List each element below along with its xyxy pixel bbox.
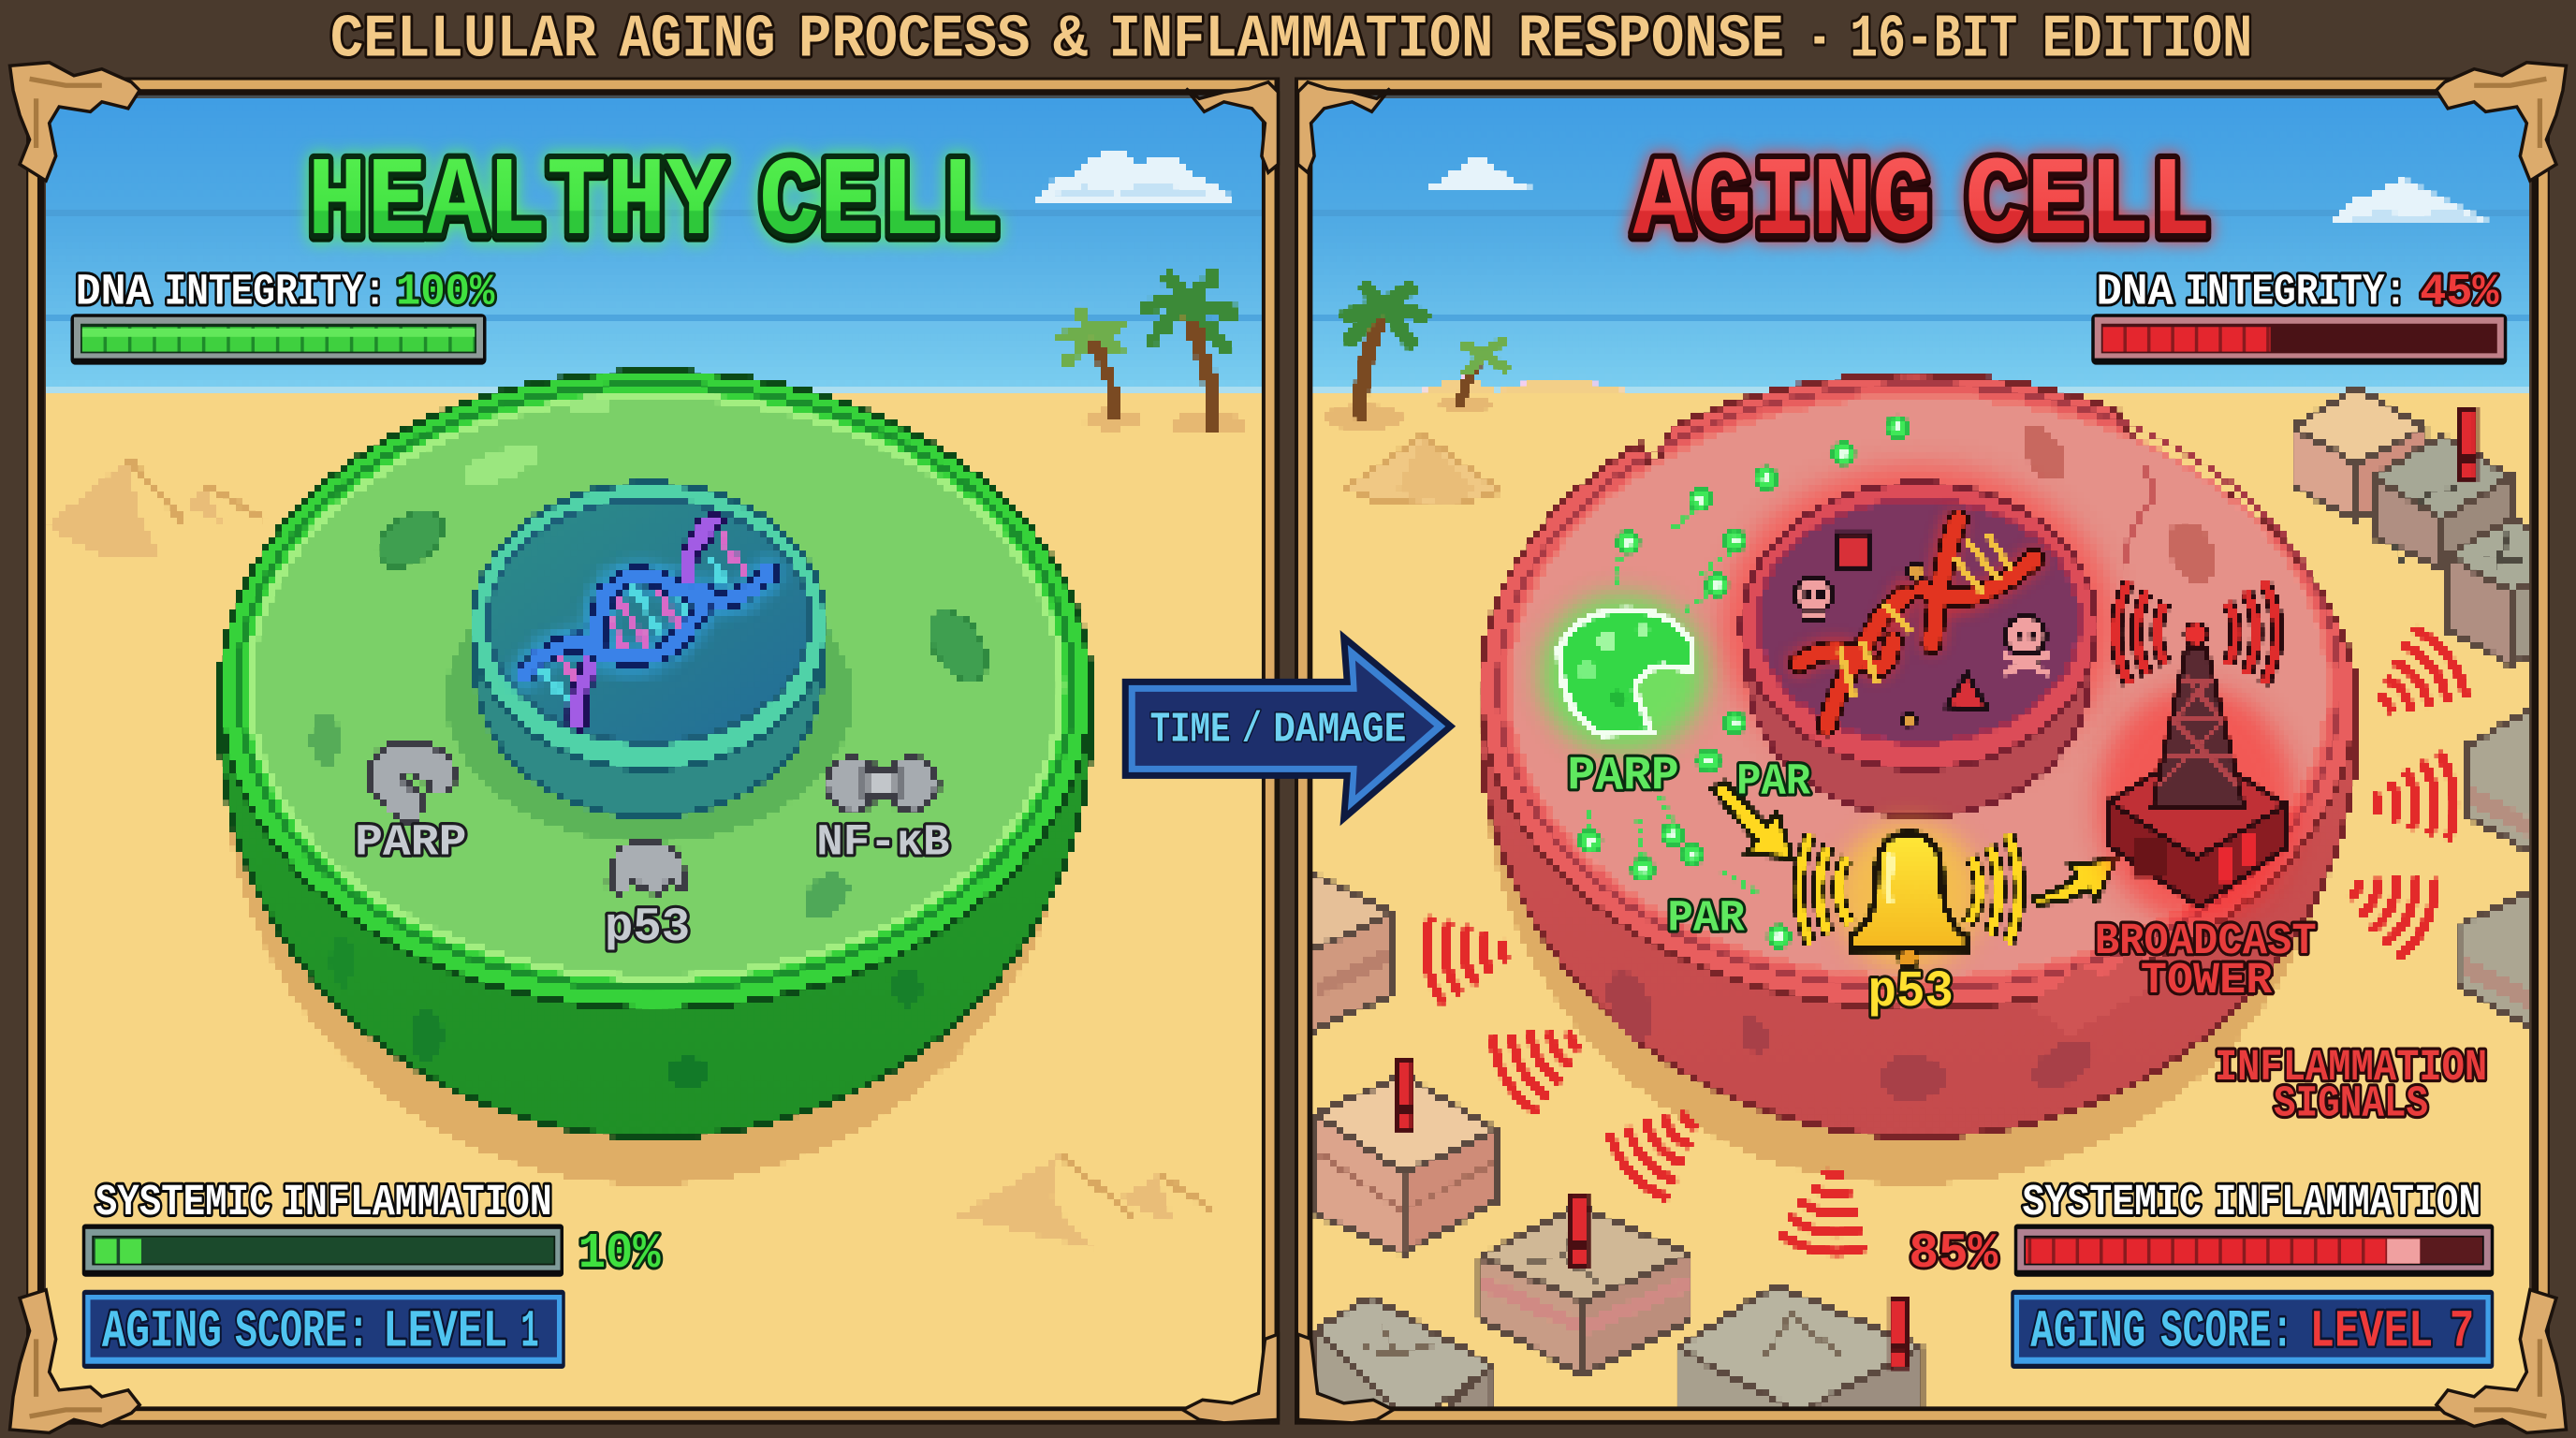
frame: healthy panel [33,84,1271,1416]
tissue block: right edge lower [2458,892,2563,1051]
title: INFLAMMATION [1109,7,1493,75]
aging cell [1480,374,2358,1137]
icon: p53 protein [609,842,685,896]
tissue block: right edge upper [2466,710,2563,871]
dune [1345,435,1501,505]
dna integrity bar: aging [2091,314,2507,365]
protein labels: healthy: PARP [355,819,466,869]
icon: broken dna [1799,520,2034,726]
dna integrity readout: healthy: INTEGRITY: [165,269,386,318]
label: broadcast tower: TOWER [2141,957,2273,1006]
dna integrity readout: healthy: 100% [396,269,495,318]
arrow: time damage: / [1242,706,1262,755]
parp and par labels: PARP [1567,750,1679,803]
icon: skull left [1795,577,1832,621]
tissue block: left edge [1298,855,1393,1030]
icon: damage fragments [1837,534,1988,726]
dna integrity readout: aging [2097,269,2499,318]
dna integrity bar: healthy [70,314,487,365]
cell shadow [1486,772,2339,1184]
heading: aging cell: AGING [1633,140,1932,267]
palm trees [1061,279,1245,437]
tissue block: grey bottom [1677,1284,1921,1413]
damaged tissue blocks [1298,388,2576,1430]
title: EDITION [2042,7,2252,75]
aging score: aging: SCORE: [2160,1301,2293,1361]
label: broadcast tower: BROADCAST [2095,917,2317,967]
title: - [1808,7,1830,75]
dna integrity readout: aging: DNA [2097,269,2174,318]
systemic inflammation: healthy [82,1179,661,1282]
horizon dunes [1412,376,1649,396]
arrow: time damage: DAMAGE [1273,706,1406,755]
title: & [1053,7,1088,75]
icon: broadcast tower [2098,581,2295,923]
title: RESPONSE [1518,7,1784,75]
palm trees [1325,289,1505,431]
label: inflammation signals [2215,1044,2487,1130]
systemic inflammation: aging: 85% [1909,1225,1998,1282]
protein labels: healthy: p53 [605,902,690,955]
icon: parp enzyme [1541,594,1705,753]
aging score: healthy [82,1290,565,1369]
aging score: healthy: AGING [102,1301,222,1361]
parp and par labels: PAR [1667,894,1745,944]
nucleus [1721,465,2116,816]
title: CELLULAR [330,7,596,75]
arrow: time damage [1125,638,1451,818]
icon: p53 alarm bell [1799,823,2019,968]
label: broadcast tower [2095,917,2317,1006]
aging score: healthy: 1 [520,1301,539,1361]
cell shadow [229,832,1048,1186]
dunes [46,459,1212,1249]
tissue block: grey far right [2446,520,2576,666]
label: inflammation signals: INFLAMMATION [2215,1044,2487,1093]
aging score: healthy: SCORE: [235,1301,370,1361]
title: 16-BIT [1850,7,2017,75]
protein labels: healthy [355,819,949,955]
tissue block: grey lower left [1316,1297,1493,1430]
icon: nf-kb protein [828,757,936,810]
parp and par labels [1567,750,1811,944]
organelles [311,396,998,926]
clouds [1419,159,2494,224]
arrow: time damage: TIME [1150,706,1231,755]
parp and par labels: PAR [1736,758,1811,808]
aging score: healthy: LEVEL [383,1301,507,1361]
alert exclamation marks [1397,411,2476,1367]
title: AGING [620,7,775,75]
heading: healthy cell: HEALTHY [307,140,726,267]
sand [1312,396,2532,1406]
heading: healthy cell: CELL [759,140,1001,267]
title [330,7,2252,75]
systemic inflammation: healthy: SYSTEMIC [95,1179,271,1228]
dna integrity readout: healthy: DNA [76,269,152,318]
heading: healthy cell [307,140,1001,267]
systemic inflammation: aging: SYSTEMIC [2023,1179,2202,1228]
nucleus [446,483,853,843]
membrane damage [2013,418,2225,1035]
aging score: aging [2011,1290,2494,1369]
label: inflammation signals: SIGNALS [2274,1080,2428,1130]
systemic inflammation: healthy: 10% [578,1225,661,1282]
sand [44,396,1262,1406]
dna integrity readout: healthy [76,269,495,318]
panel: aging cell [1298,95,2576,1430]
dna integrity readout: aging: INTEGRITY: [2185,269,2407,318]
sky [44,95,1262,396]
arrow: par to p53 [1712,782,1793,858]
aging score: aging: LEVEL [2310,1301,2433,1361]
arrow: p53 to tower [2032,859,2116,903]
tissue block: tan upper right [2293,388,2425,520]
icon: parp protein [387,756,440,805]
title: PROCESS [798,7,1030,75]
dna integrity readout: aging: 45% [2420,269,2499,318]
cloud [1033,150,1232,200]
healthy cell [220,372,1090,1137]
heading: aging cell [1633,140,2211,267]
tissue block: tan lower left [1316,1075,1497,1254]
icon: dna helix [526,520,768,723]
protein labels: healthy: NF-κB [816,819,949,869]
frame: aging panel [1303,84,2543,1416]
systemic inflammation: healthy: INFLAMMATION [283,1179,552,1228]
aging score: aging: AGING [2030,1301,2145,1361]
systemic inflammation: aging [1909,1179,2494,1282]
aging score: aging: 7 [2450,1301,2474,1361]
par particles [1580,417,1909,947]
tissue block: cracked centre [1480,1206,1690,1375]
tissue block: grey upper right [2374,435,2512,568]
label: p53 activated: p53 [1868,964,1954,1021]
icon: skull right [2002,616,2049,674]
sky [1312,95,2532,396]
heading: aging cell: CELL [1965,140,2211,267]
systemic inflammation: aging: INFLAMMATION [2215,1179,2481,1228]
inflammation signal waves [1421,624,2472,1257]
